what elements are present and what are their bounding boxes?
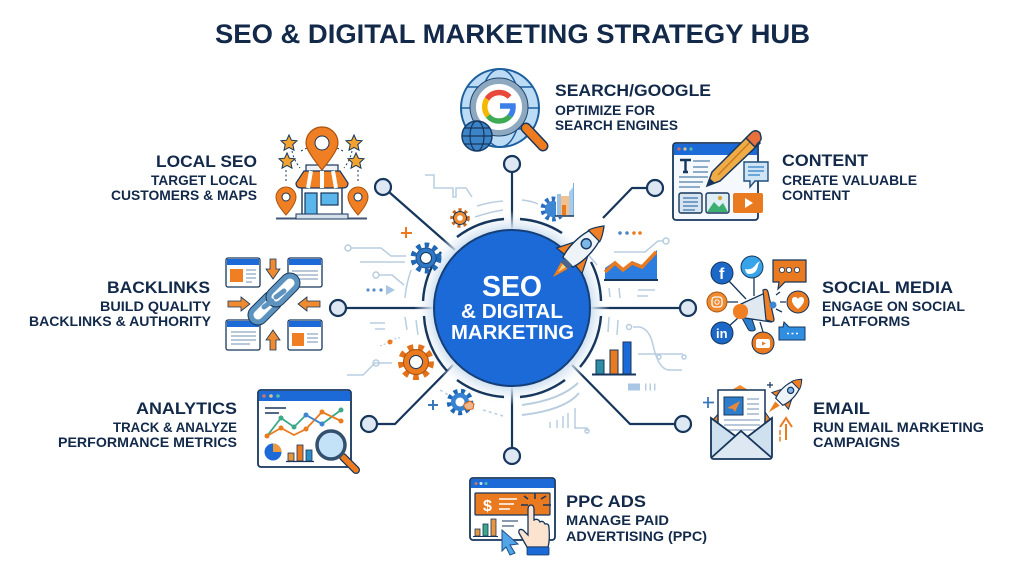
title: SEO & DIGITAL MARKETING STRATEGY HUB bbox=[215, 19, 810, 49]
text: analytics bbox=[58, 399, 237, 450]
ring segments bbox=[423, 219, 601, 397]
decorative circuit traces bbox=[345, 175, 686, 433]
text: email bbox=[813, 399, 984, 450]
text: local seo: LOCAL SEO bbox=[156, 152, 257, 171]
text: search google: SEARCH/GOOGLE bbox=[555, 81, 711, 100]
text: search google: SEARCH ENGINES bbox=[555, 117, 678, 133]
icon: social media bbox=[707, 256, 809, 354]
icon: search google bbox=[461, 69, 543, 151]
icon: backlinks bbox=[226, 258, 322, 350]
mini chart with gear bbox=[543, 183, 578, 219]
text: backlinks: BACKLINKS & AUTHORITY bbox=[29, 313, 212, 329]
gear: blue lower bbox=[449, 391, 474, 413]
hub label bbox=[451, 271, 574, 344]
text: content bbox=[782, 151, 917, 203]
area chart bbox=[604, 250, 658, 280]
text: analytics: PERFORMANCE METRICS bbox=[58, 434, 237, 450]
text: local seo: CUSTOMERS & MAPS bbox=[111, 187, 257, 203]
icon: local seo bbox=[276, 127, 368, 219]
text: ppc ads: ADVERTISING (PPC) bbox=[566, 528, 707, 544]
text: content: CONTENT bbox=[782, 151, 869, 170]
icon: ppc ads bbox=[470, 478, 555, 555]
text: local seo bbox=[111, 152, 257, 203]
decorative dots and plus marks bbox=[366, 227, 642, 410]
gear: small orange bbox=[452, 210, 468, 226]
text: backlinks: BUILD QUALITY bbox=[100, 298, 212, 314]
text: analytics: ANALYTICS bbox=[136, 399, 237, 418]
hub label: & DIGITAL bbox=[461, 301, 563, 323]
text: email: RUN EMAIL MARKETING bbox=[813, 419, 984, 435]
text: ppc ads bbox=[566, 492, 707, 544]
icon: email bbox=[703, 371, 810, 459]
text: email: CAMPAIGNS bbox=[813, 434, 900, 450]
gear: large orange bbox=[401, 347, 431, 377]
text: ppc ads: MANAGE PAID bbox=[566, 512, 669, 528]
text: backlinks bbox=[29, 278, 212, 329]
rocket bbox=[540, 213, 617, 290]
hub label: SEO bbox=[482, 271, 542, 303]
bar chart bbox=[592, 342, 636, 374]
icon: content bbox=[673, 131, 768, 220]
icon: social media: in bbox=[716, 326, 728, 341]
text: search google: OPTIMIZE FOR bbox=[555, 102, 655, 118]
text: email: EMAIL bbox=[813, 399, 870, 418]
central hub bbox=[414, 210, 610, 406]
text: content: CREATE VALUABLE bbox=[782, 172, 917, 188]
gear: blue upper bbox=[413, 245, 439, 271]
icon: analytics bbox=[258, 390, 356, 470]
text: search google bbox=[555, 81, 711, 133]
text: ppc ads: PPC ADS bbox=[566, 492, 646, 511]
text: social media: ENGAGE ON SOCIAL bbox=[822, 298, 965, 314]
text: social media bbox=[822, 278, 965, 329]
icon: social media: f bbox=[719, 266, 725, 283]
text: analytics: TRACK & ANALYZE bbox=[113, 419, 237, 435]
icon: ppc ads: $ bbox=[483, 498, 492, 515]
text: backlinks: BACKLINKS bbox=[107, 278, 210, 297]
text: content: CONTENT bbox=[782, 187, 850, 203]
text: social media: PLATFORMS bbox=[822, 313, 910, 329]
text: social media: SOCIAL MEDIA bbox=[822, 278, 953, 297]
hub label: MARKETING bbox=[451, 322, 574, 344]
connector spokes bbox=[330, 156, 696, 464]
text: local seo: TARGET LOCAL bbox=[151, 172, 257, 188]
